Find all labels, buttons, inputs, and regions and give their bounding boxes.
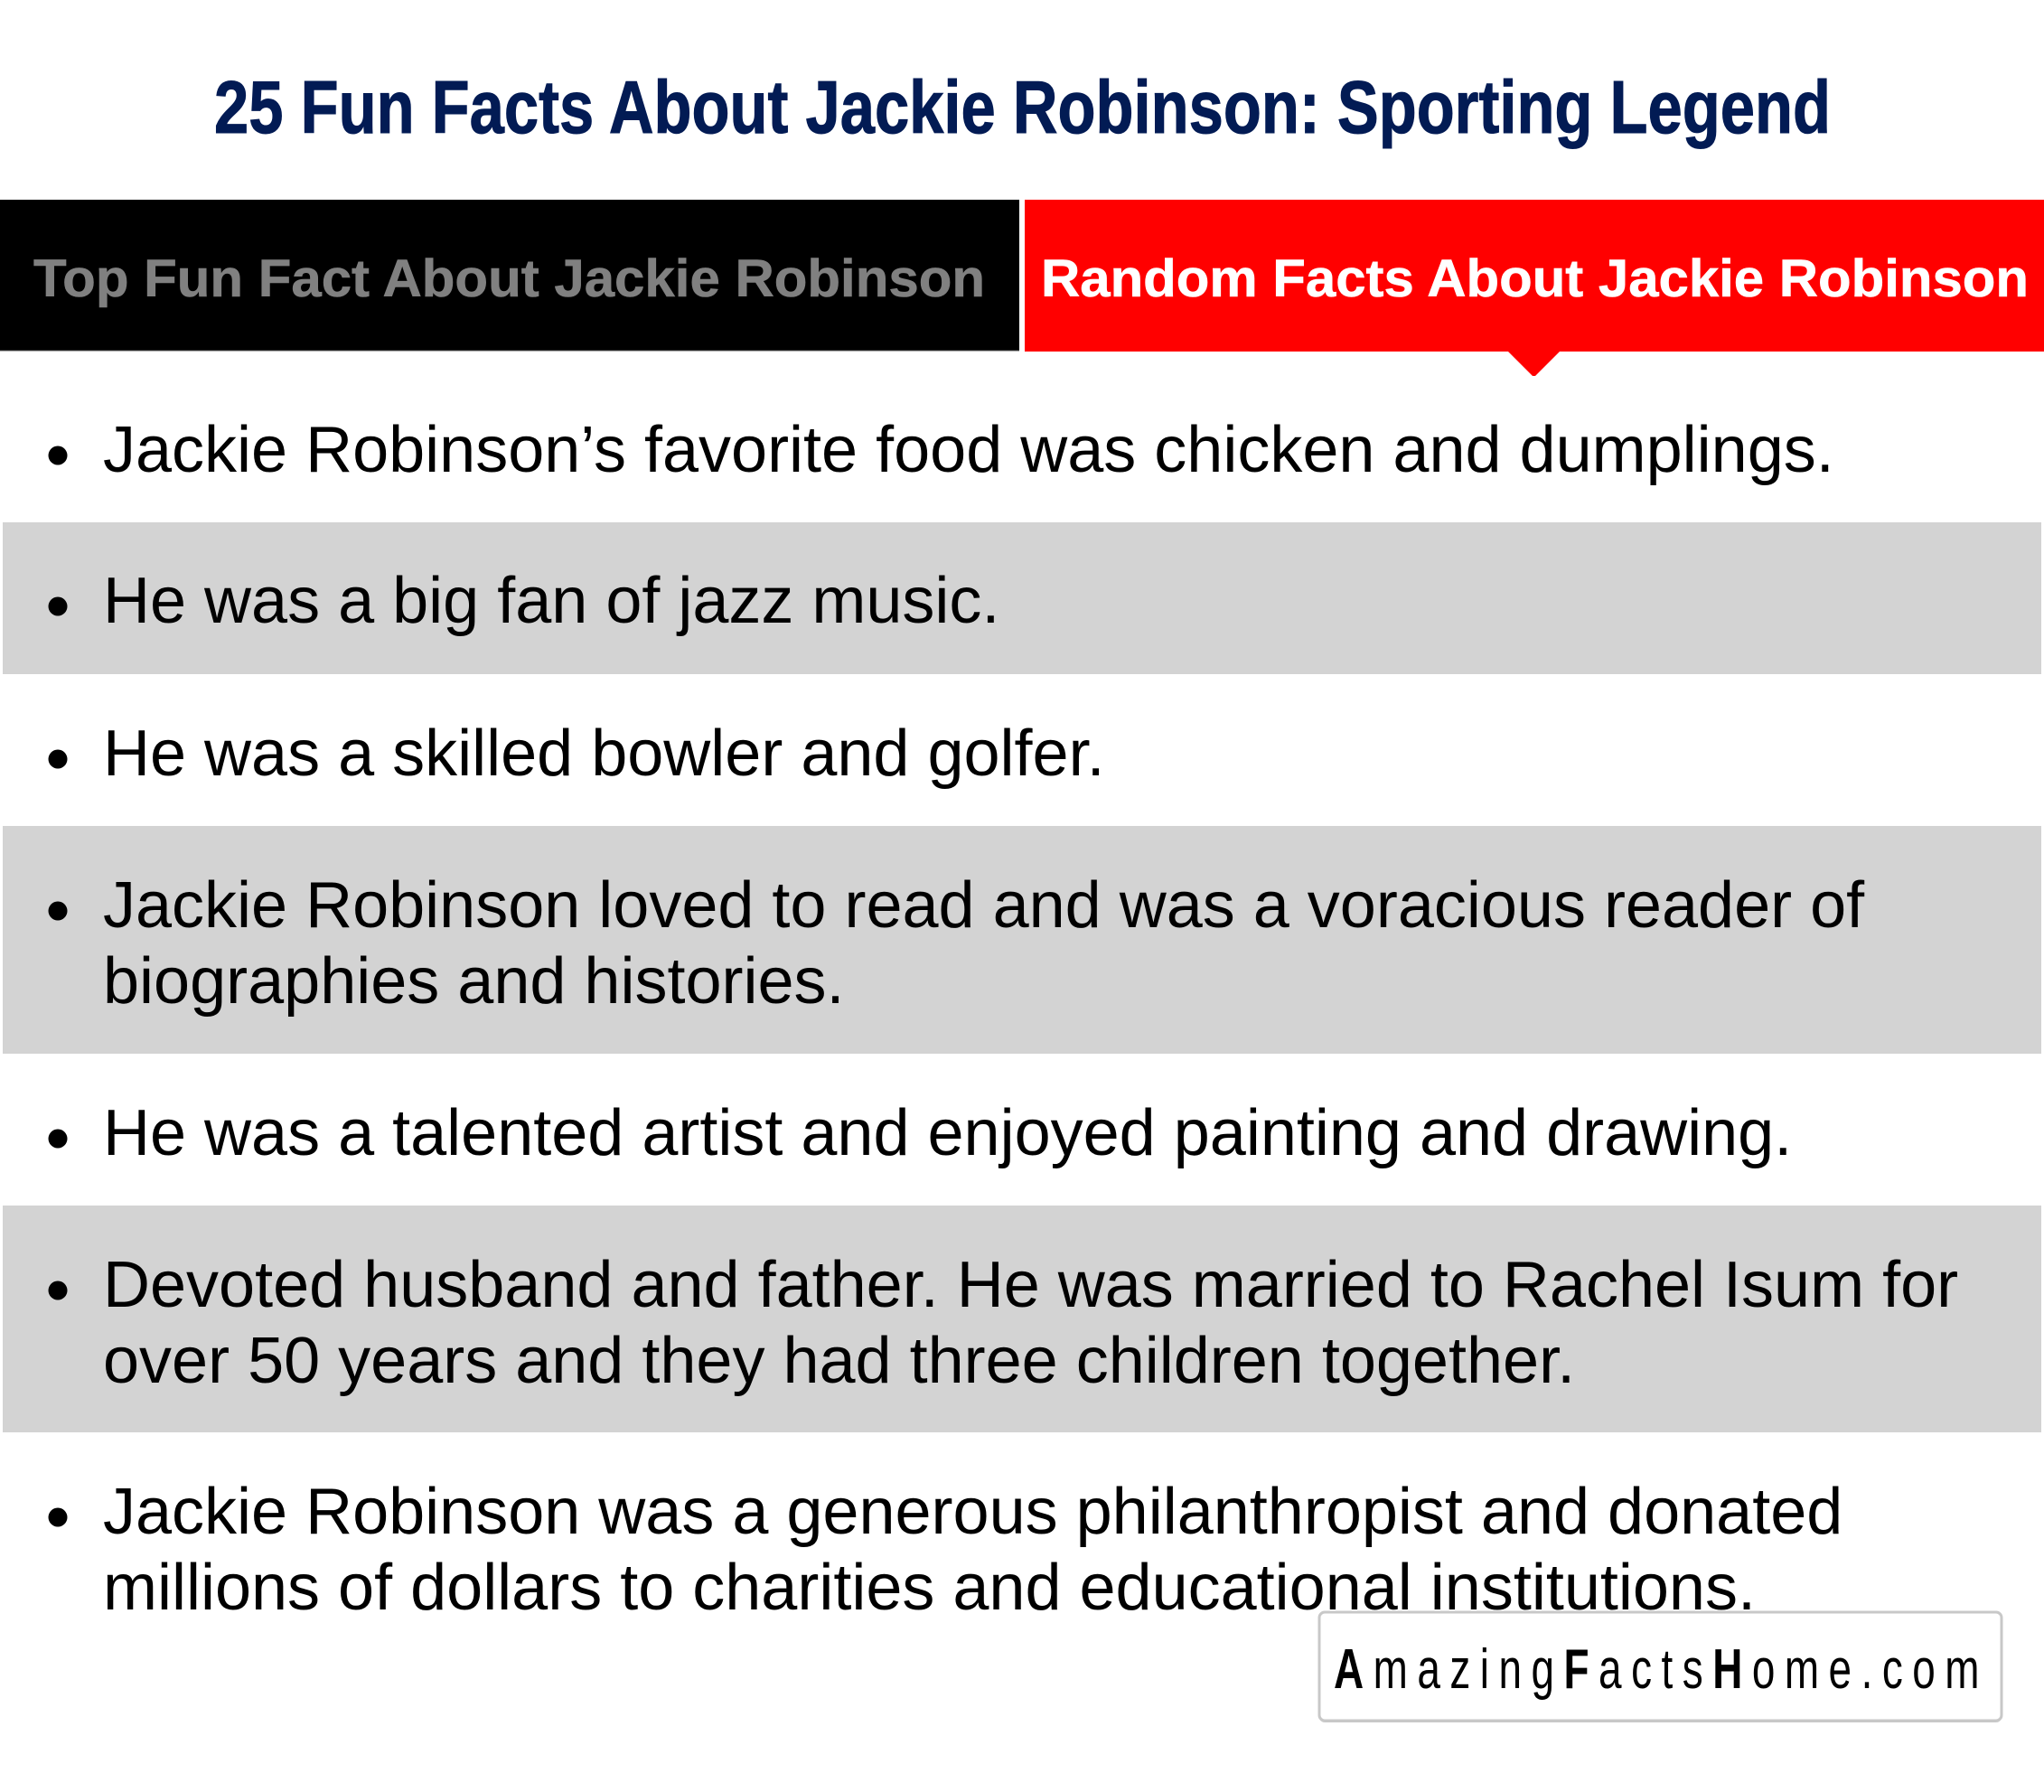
fact 4: [3, 826, 2041, 1054]
watermark: AmazingFactsHome.com: [1319, 1612, 2002, 1722]
fact 7: millions of dollars to charities and educational institutions.: [103, 1552, 1756, 1624]
fact 6: [3, 1206, 2041, 1432]
tab: random facts (active): [1025, 200, 2044, 376]
fact 2: He was a big fan of jazz music.: [103, 565, 999, 637]
fact 3: He was a skilled bowler and golfer.: [103, 718, 1105, 790]
watermark: AmazingFactsHome.com: AmazingFactsHome.com: [1334, 1637, 1989, 1701]
fact list: [3, 414, 2041, 1624]
fact 7: Jackie Robinson was a generous philanthropist and donated: [103, 1476, 1842, 1548]
fact 6: Devoted husband and father. He was married to Rachel Isum for: [103, 1249, 1958, 1321]
fact 4: Jackie Robinson loved to read and was a voracious reader of: [103, 869, 1865, 942]
fact 1: Jackie Robinson’s favorite food was chicken and dumplings.: [103, 414, 1834, 486]
fact 7: [49, 1476, 1842, 1624]
fact 2: [3, 522, 2041, 674]
tab: top fun fact (inactive): [0, 200, 1019, 351]
tab: random facts (active): Random Facts About Jackie Robinson: [1041, 249, 2029, 308]
tab: top fun fact (inactive): Top Fun Fact About Jackie Robinson: [33, 249, 985, 308]
fact 4: biographies and histories.: [103, 945, 845, 1018]
fact 5: He was a talented artist and enjoyed painting and drawing.: [103, 1097, 1792, 1169]
fact 6: over 50 years and they had three children together.: [103, 1325, 1575, 1397]
